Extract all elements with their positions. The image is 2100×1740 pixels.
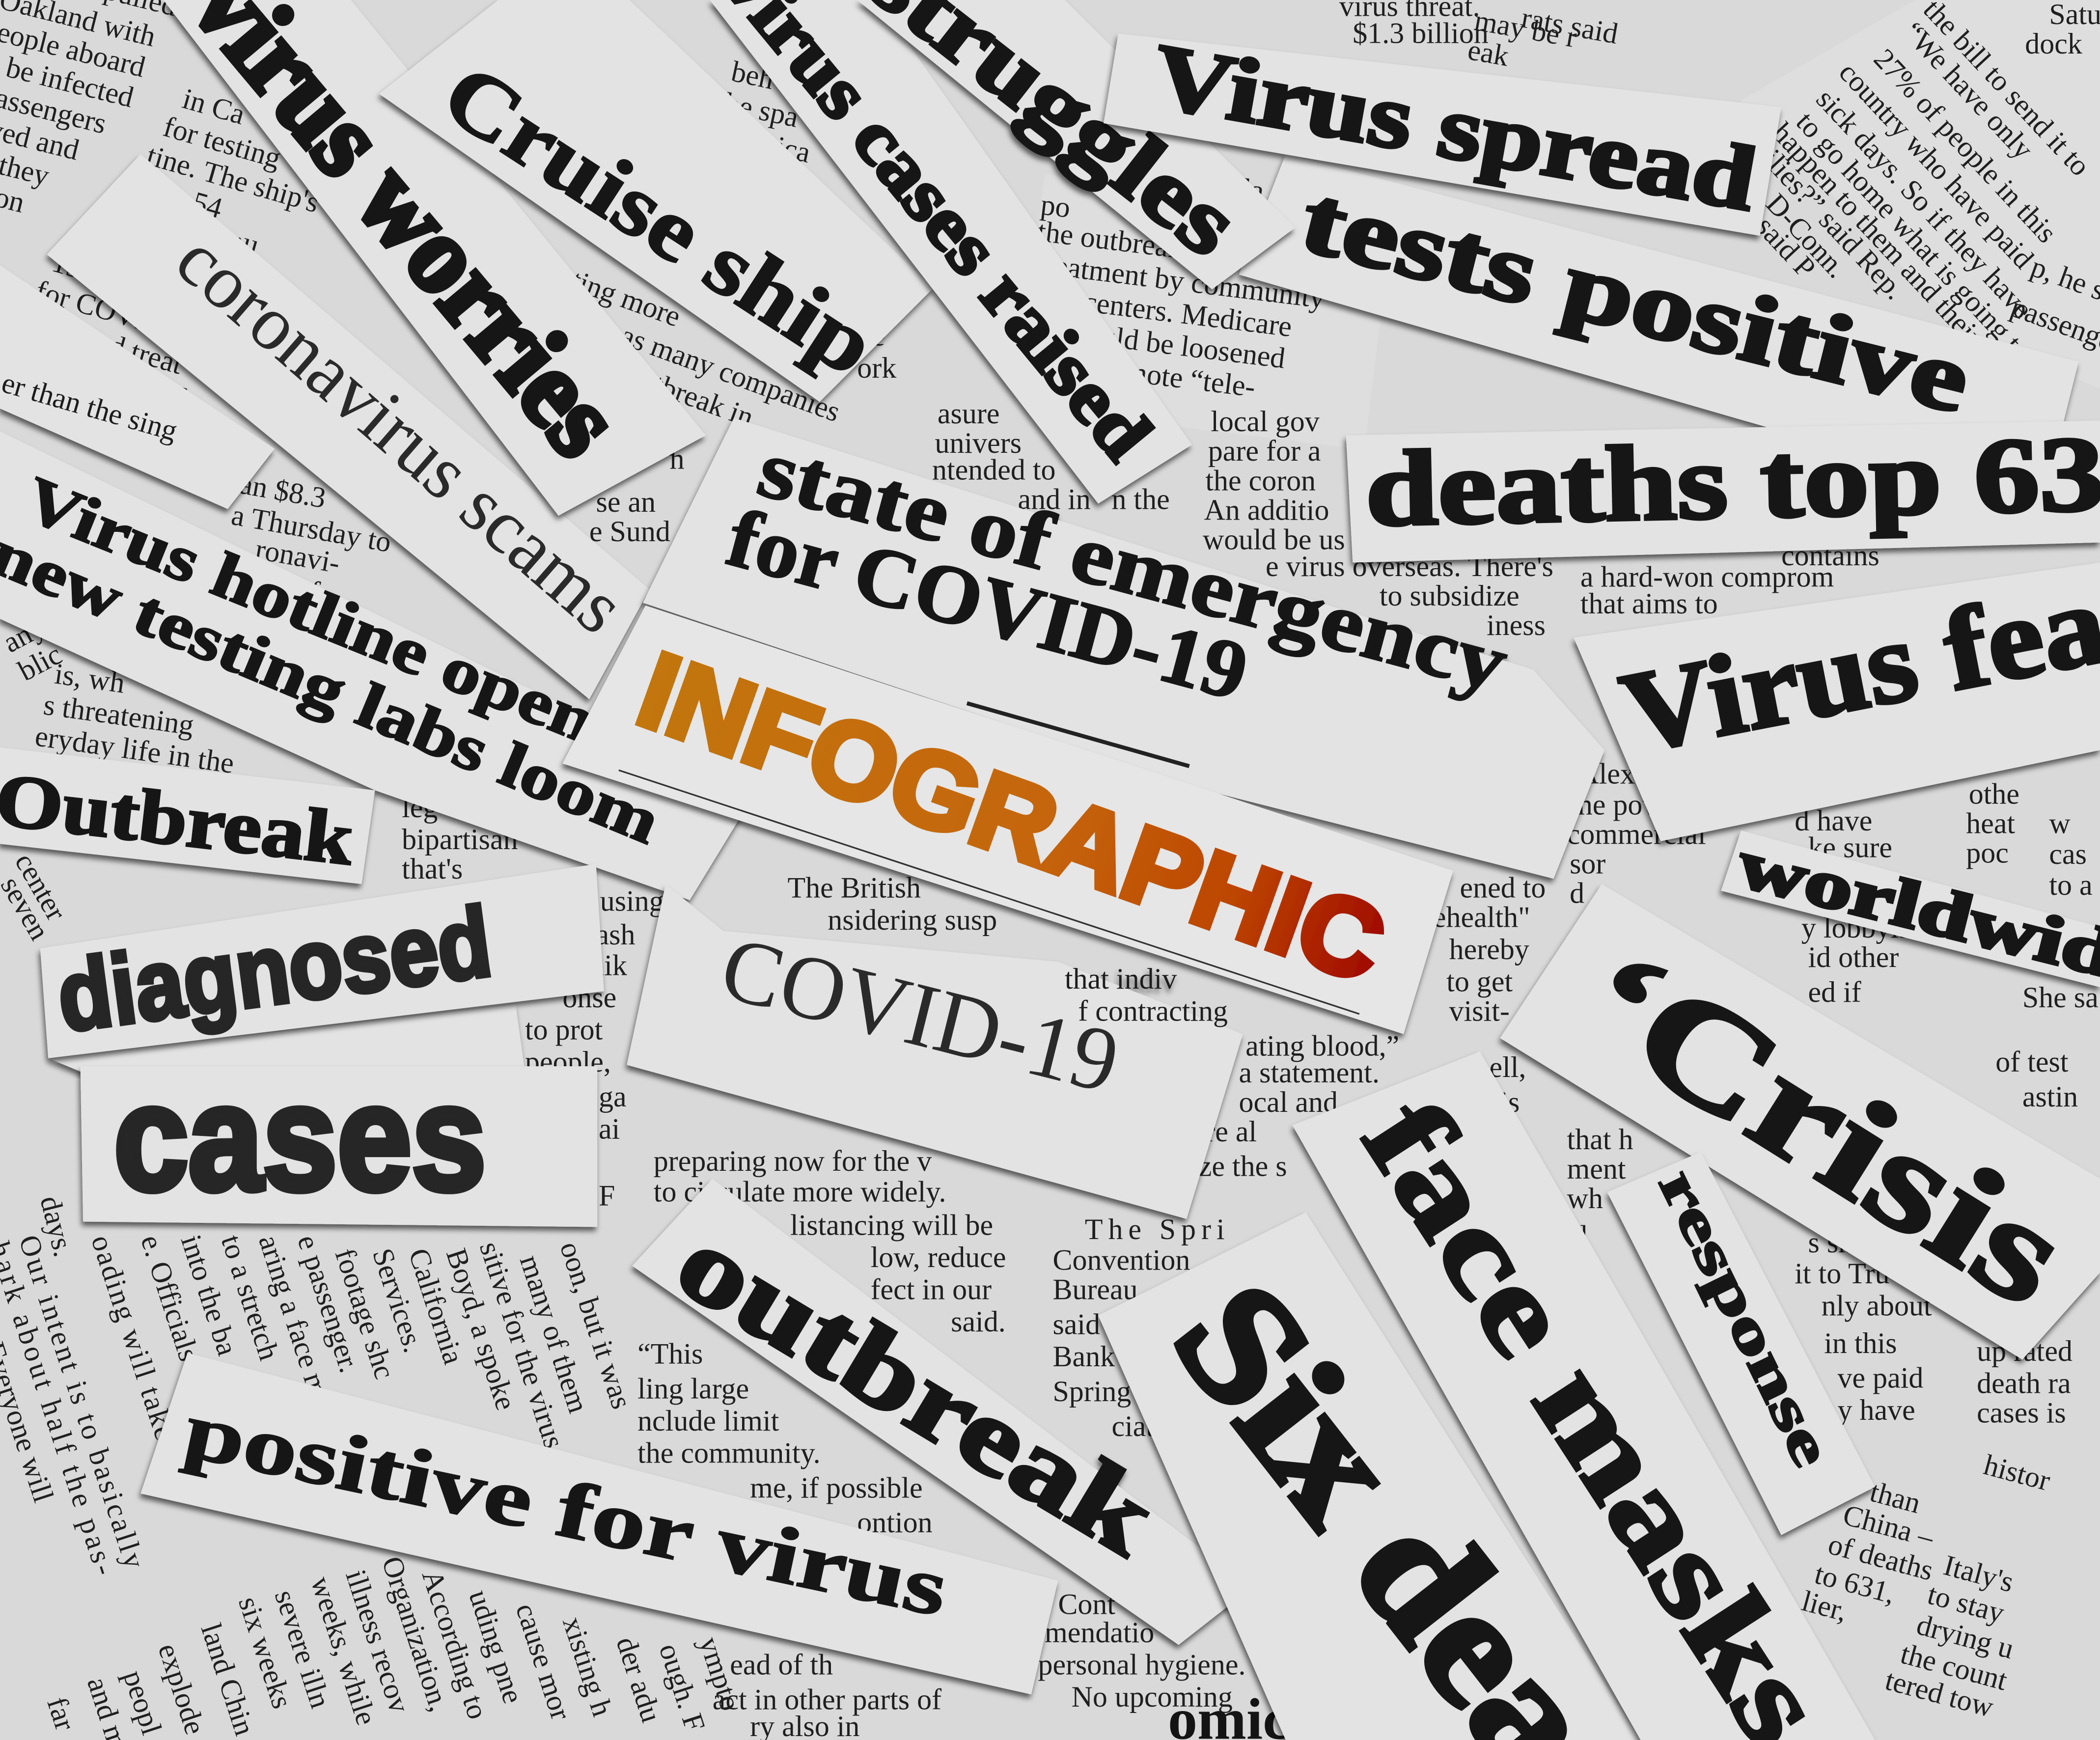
body text: cruise story: ountries will (110, 196, 261, 268)
body text: top left column (0, 0, 180, 243)
body text: left rotated column: many of them (514, 1251, 595, 1417)
body text: bottom centre column: personal hygiene. (1038, 1648, 1246, 1681)
body text: bottom right columns: than (1867, 1475, 1924, 1519)
headline: face masks: face masks (1337, 1076, 1852, 1740)
body text: cruise story: hich will dock (27, 339, 198, 417)
body text: medicare story: eatment by community (1053, 249, 1326, 315)
body text: bottom right columns: to 631, (1811, 1557, 1899, 1610)
body text: medicare story: the outbreak (1036, 215, 1185, 265)
body text: central column: ze the s (1199, 1150, 1287, 1183)
body text: top centre column: beh (729, 55, 777, 95)
body text: companies story (543, 264, 857, 461)
body text: spring convention column: Convention (1052, 1244, 1190, 1276)
body text: preparing column: me, if possible (750, 1471, 923, 1504)
body text: top right rotated column: ilies?” said Rep. (1757, 143, 1911, 305)
body text: bottom left rotated column: Organization, (376, 1552, 456, 1715)
body text: companies story: fter an outbreak in (543, 329, 758, 434)
clipping: struggles (851, 0, 1295, 289)
body text: university story: asure (938, 397, 999, 430)
body text: local government column (1203, 405, 1553, 641)
body text: left lower snippets: is, wh (53, 658, 127, 699)
body text: sunday story fragments: h (670, 443, 685, 475)
body text: university story: n the (1111, 483, 1170, 515)
body text: telehealth column: to get (1446, 965, 1513, 997)
body text: cruise story: from 54 (127, 167, 226, 224)
body text: cruise story: in Ca (179, 82, 249, 131)
body text: central column (1199, 1029, 1399, 1183)
body text: central column: ating blood,” (1245, 1029, 1399, 1062)
body text: top strip column: rats said (1519, 1, 1621, 50)
body text: top right rotated column: country who have paid (1833, 56, 2040, 275)
body text: telehealth column: is (1500, 1086, 1520, 1118)
body text: top right rotated column: to go home what is going to (1790, 106, 2038, 368)
body text: bottom left rotated column (41, 1552, 747, 1740)
body text: bottom right columns: to stay (1924, 1578, 2008, 1629)
body text: bottom right columns: histor (1981, 1448, 2054, 1497)
clipping: left blank paper scrap (0, 265, 275, 509)
headline: cases: cases (114, 1053, 486, 1221)
body text: right middle columns: in this (1824, 1327, 1897, 1359)
clipping: cruise ship (379, 0, 934, 402)
headline: virus spread: Virus spread (1146, 25, 1763, 230)
body text: bottom right columns: Italy's (1940, 1549, 2017, 1599)
body text: left lower snippets: bipartisan (402, 823, 518, 856)
body text: top centre column: America (707, 116, 813, 169)
body text: top right rotated column: 27% of people in this (1868, 43, 2063, 249)
title: infographic: INFOGRAPHIC (624, 630, 1399, 1005)
body text: cruise story: tined and treat (16, 303, 187, 381)
body text: spring convention column: said (1052, 1308, 1100, 1341)
background sheet: top right (1741, 0, 2100, 388)
body text: left rotated column: e. Officials are (135, 1231, 219, 1406)
body text: local government column: e virus overseas. There's (1266, 550, 1553, 582)
body text: left rotated column: California (402, 1244, 470, 1368)
body text: left lower snippets (0, 467, 997, 1018)
body text: bottom centre column: mendatio (1045, 1616, 1154, 1649)
headline: deaths top 63: deaths top 63 (1364, 415, 2100, 549)
body text: left rotated column: e passenger. (291, 1231, 366, 1377)
body text: local government column: local gov (1211, 405, 1320, 438)
headline: COVID-19: COVID-19 (712, 917, 1129, 1113)
body text: local government column: would be us (1203, 523, 1345, 555)
body text: companies story: ome, as many companies (555, 296, 844, 428)
body text: bottom left rotated column: illness recov (339, 1566, 416, 1717)
body text: university story (932, 397, 1170, 515)
body text: right middle columns: y have (1838, 1394, 1915, 1426)
body text: bottom centre column: No upcoming (1072, 1681, 1233, 1713)
body text: sunday story fragments: ith (643, 429, 674, 462)
scrap text: er than the sing (0, 366, 181, 447)
body text: sunday story fragments: ork (857, 352, 896, 384)
body text: cruise story: tine. The ship's (143, 139, 323, 219)
body text: far right column: poc (1966, 836, 2009, 869)
body text: left rotated column: into the ba (175, 1231, 244, 1359)
body text: sidebar beside cases: ga (599, 1080, 627, 1113)
body text: preparing column: preparing now for the v (654, 1145, 932, 1177)
body text: bottom centre column: Cont (1058, 1588, 1115, 1621)
body text: lobbyist column: y lobbyist. (1801, 911, 1926, 944)
body text: preparing column (637, 1145, 1006, 1539)
body text: right middle columns: s she (1808, 1226, 1866, 1259)
body text: left lower snippets: by (243, 591, 277, 628)
headline: diagnosed: diagnosed (51, 885, 497, 1052)
body text: left lower snippets: s of (274, 569, 322, 608)
clipping: infographic title strip (562, 606, 1453, 1034)
body text: telehealth column: hereby (1449, 933, 1529, 966)
body text: far right column: othe (1969, 777, 2019, 810)
body text: far right column: d have (1795, 804, 1872, 837)
body text: bottom right columns: the count (1897, 1637, 2011, 1697)
clipping: worldwide (1721, 827, 2100, 1002)
body text: left rotated column: to a stretch (215, 1231, 286, 1364)
body text on COVID-19 edge: that indiv (1065, 963, 1177, 995)
body text: top right rotated column (1750, 0, 2100, 368)
body text: lobbyist column: commercial (1567, 818, 1706, 850)
body text: medicare story: lth centers. Medicare (1044, 280, 1294, 343)
body text: lobbyist column (1567, 758, 1926, 1008)
body text: left lower snippets: nneq (64, 939, 121, 1005)
body text: left lower snippets: The British (788, 871, 921, 904)
body text: right middle columns: cases is (1977, 1397, 2066, 1429)
body text: sidebar beside cases: people, (525, 1046, 611, 1078)
body text: bottom centre column: act in other parts of (713, 1683, 941, 1715)
body text: bottom left rotated column: der adu (610, 1633, 668, 1726)
body text: bottom right columns: tered tow (1882, 1663, 1997, 1723)
body text: lobbyist column: d (1570, 877, 1584, 909)
body text: central column: re al (1205, 1115, 1257, 1148)
body text: medicare story: dolla (1203, 168, 1266, 207)
body text: cruise story: Abo (96, 225, 154, 271)
body text: bottom right columns: lier, (1798, 1584, 1851, 1628)
body text: bottom right columns: of deaths (1825, 1528, 1937, 1587)
body text: medicare story (1016, 148, 1396, 449)
body text: local government column: An additio (1204, 494, 1329, 526)
body text: local government column: to subsidize (1380, 580, 1520, 612)
body text: contracting fragment: f contracting (1078, 994, 1228, 1027)
body text: central column: ocal and (1239, 1086, 1338, 1118)
headline: crisis: ‘Crisis (1553, 915, 2095, 1337)
body text: central column: a statement. (1239, 1056, 1380, 1089)
body text: top centre column: rafting th (698, 147, 811, 201)
body text: left rotated column: Our intent is to basically (13, 1231, 151, 1572)
body text: top centre column (691, 53, 848, 236)
body text: top strip column (1339, 0, 2100, 72)
body text: far right column: ke sure (1808, 831, 1892, 864)
body text: preparing column: “This (637, 1338, 703, 1370)
body text: bottom left rotated column: uding pne (463, 1586, 529, 1707)
clipping: diagnosed (40, 864, 604, 1058)
body text: sunday story fragments: e Sund (589, 515, 670, 548)
body text: lobbyist column: ed if (1808, 976, 1861, 1008)
body text: compromise column: a hard-won comprom (1580, 561, 1834, 593)
body text: left rotated column: Services. (366, 1244, 430, 1356)
body text: bottom left rotated column: cause mor (510, 1600, 578, 1724)
body text: left lower snippets: that's (402, 853, 463, 885)
body text: bottom left rotated column: weeks, while (304, 1573, 383, 1729)
body text: far right column (1795, 777, 2093, 901)
body text: bottom left rotated column: land Chin (195, 1620, 261, 1739)
body text: far right column: cas (2049, 838, 2087, 870)
body text: preparing column: ling large (637, 1372, 749, 1405)
headline: state of emergency: state of emergency (749, 421, 1517, 710)
body text: sunday story fragments: se an (596, 486, 656, 518)
body text: telehealth column (1433, 871, 1633, 1279)
body text: medicare story: po (1039, 188, 1072, 224)
headline: worldwide: worldwide (1731, 827, 2100, 1002)
body text: bottom left rotated column: six weeks (232, 1593, 299, 1712)
body text: left rotated column: Boyd, a spoke (440, 1244, 523, 1414)
body text: sidebar beside cases: to prot (525, 1014, 603, 1046)
headline: for COVID-19: for COVID-19 (718, 491, 1257, 718)
clipping: outbreak strip (0, 747, 375, 884)
body text: right middle columns: nly about (1822, 1289, 1932, 1322)
body text: spring convention column: Bureau (1052, 1273, 1138, 1306)
clipping: virus fears (1574, 559, 2100, 841)
headline: virus hotline open: Virus hotline open (15, 463, 607, 757)
body text: sunday story fragments: ge (857, 320, 885, 352)
body text: cruise story: 19 of (49, 246, 116, 294)
body text: preparing column: to circulate more widely. (654, 1176, 946, 1208)
body text: left lower snippets: from (224, 617, 286, 659)
body text: bottom left rotated column: According to (416, 1566, 495, 1723)
body text: preparing column: said. (951, 1305, 1006, 1338)
body text: left rotated column: oading will take up (85, 1231, 194, 1483)
body text: cruise story: for COVID (32, 274, 171, 342)
body text: top left column: be infected (3, 51, 137, 113)
clipping: cases (81, 1053, 597, 1227)
body text: top right rotated column: happen to them and their (1766, 116, 1989, 353)
body text: left lower snippets: an $8.3 (237, 468, 329, 514)
body text: right middle columns: She sa (2022, 981, 2099, 1014)
body text: right middle columns: up rated (1977, 1335, 2072, 1367)
body text: top strip column: dock (2025, 28, 2082, 60)
body text: sidebar beside cases: F (599, 1180, 615, 1212)
body text: medicare story: would be loosened (1064, 315, 1287, 375)
body text: compromise column (1580, 539, 1879, 620)
body text: top right rotated column: sick days. So if they have (1810, 83, 2039, 325)
body text: left lower snippets: nsidering susp (828, 904, 997, 936)
clipping: positive for virus (140, 1353, 1058, 1694)
body text: right middle columns: it to Tru (1795, 1257, 1890, 1290)
body text: telehealth column: b (1574, 1246, 1588, 1279)
body text: top strip column: may be r (1472, 4, 1579, 54)
body text: university story: and in (1018, 483, 1091, 515)
body text: far right column: heat (1966, 807, 2016, 839)
body text: compromise column: contains (1781, 539, 1879, 572)
body text: bottom left rotated column: severe illn (269, 1586, 337, 1712)
headline: response: response (1647, 1160, 1844, 1476)
body text: sidebar beside cases: onse (562, 981, 616, 1014)
body text: local government column: the coron (1205, 464, 1316, 497)
body text: bottom centre column (713, 1588, 1246, 1740)
body text: bottom right columns: China – (1840, 1498, 1938, 1554)
clipping: crisis (1500, 884, 2100, 1359)
body text: telehealth column: that h (1567, 1123, 1633, 1156)
clipping: coronavirus scams (47, 154, 650, 699)
body text: top right rotated column: , D-Conn. (1750, 176, 1853, 284)
body text: bottom right columns: drying u (1913, 1608, 2017, 1665)
body text: university story: ntended to (932, 453, 1056, 486)
clipping: response (1607, 1152, 1875, 1535)
body text: left lower snippets: leg (402, 791, 438, 824)
body text: sunday story fragments (589, 320, 896, 548)
body text: bottom centre column: ead of th (730, 1648, 833, 1681)
body text: far right column: w (2049, 807, 2071, 839)
headline: cruise ship: Cruise ship (426, 44, 893, 394)
body text: sidebar beside cases: ash (596, 918, 635, 951)
body text: left rotated column: aring a face m (252, 1231, 335, 1401)
body text: top strip column: eak (1465, 33, 1511, 72)
body text: left lower snippets: blic (13, 638, 67, 687)
body text: companies story: ting more (567, 264, 685, 333)
clipping: state of emergency (643, 418, 1604, 879)
body text: bottom left rotated column: peopl (117, 1666, 168, 1739)
body text: spring convention column: Spring (1052, 1375, 1131, 1408)
body text: spring convention column: The Spri (1085, 1213, 1230, 1245)
body text: left rotated column (0, 1192, 638, 1579)
clipping: tests positive (1239, 154, 2078, 434)
body text: left lower snippets: a Thursday to (229, 498, 394, 558)
body text: top strip column: $1.3 billion (1353, 17, 1489, 49)
body text: telehealth column: ell, (1489, 1051, 1526, 1083)
body text: telehealth column: wh (1567, 1182, 1603, 1215)
body text: top right rotated column: “We have only (1897, 16, 2040, 166)
body text: top centre column: be spa (722, 86, 801, 134)
body text: preparing column: fect in our (871, 1273, 992, 1306)
body text: preparing column: low, reduce (871, 1241, 1006, 1273)
body text: university story: univers (935, 427, 1022, 459)
body text: preparing column: nclude limit (637, 1405, 779, 1437)
headline: virus fears: Virus fea (1612, 559, 2100, 777)
body text: left lower snippets: ronavi- (253, 533, 342, 580)
body text: telehealth column: ened to (1460, 871, 1546, 904)
body text: far right column: to a (2049, 869, 2093, 901)
body text: right middle columns: ve paid (1838, 1362, 1923, 1394)
body text: left rotated column: oon, but it was (554, 1238, 638, 1413)
body text: telehealth column: ehealth" (1433, 901, 1530, 933)
body text: telehealth column: visit- (1449, 994, 1510, 1027)
body text: bottom left rotated column: xisting h (556, 1613, 619, 1720)
body text: top right rotated column: said P (1750, 210, 1822, 284)
body text: local government column: iness (1487, 609, 1546, 641)
body text: telehealth column: ment (1567, 1153, 1626, 1185)
body text: spring convention column (1052, 1213, 1230, 1442)
body text: right middle columns: astin (2022, 1080, 2078, 1113)
body text: top centre column: said App (712, 183, 821, 236)
body text: bottom right columns (1798, 1448, 2054, 1725)
body text: spring convention column: Bank (1052, 1340, 1115, 1373)
body text: left rotated column: sitive for the virus (473, 1238, 571, 1452)
body text: telehealth column: el (1567, 1220, 1588, 1252)
body text: left lower snippets: center (9, 847, 73, 926)
body text: left rotated column: footage shc (329, 1244, 401, 1383)
headline: coronavirus scams: coronavirus scams (160, 216, 641, 650)
body text: sidebar beside cases (525, 885, 664, 1212)
body text: bottom left rotated column: ough. F (653, 1639, 712, 1735)
body text: spring convention column: ciat (1111, 1410, 1154, 1442)
body text: sidebar beside cases: ai (599, 1112, 620, 1145)
body text: preparing column: the community. (637, 1436, 821, 1469)
headline: outbreak: Outbreak (0, 758, 358, 881)
clipping: face masks (1293, 1051, 1875, 1740)
clipping: virus cases raised (708, 0, 1192, 504)
body text: preparing column: ontion (857, 1506, 933, 1539)
body text: compromise column: that aims to (1580, 587, 1718, 620)
body text: sidebar beside cases: lik (596, 949, 627, 982)
body text: bottom left rotated column: explode (152, 1639, 212, 1738)
body text: left lower snippets: eryday life in the (33, 719, 236, 779)
body text: cruise story (6, 55, 340, 435)
body text: local government column: pare for a (1208, 435, 1321, 467)
body text: sidebar beside cases: using (600, 885, 664, 917)
body text: lobbyist column: Alex (1577, 758, 1635, 790)
body text: bottom left rotated column: ympto (693, 1633, 747, 1714)
clipping: virus worries (164, 0, 706, 516)
clipping: virus spread (1104, 25, 1781, 236)
body text: right middle columns (1795, 981, 2099, 1429)
body text: cruise story: for testing (160, 110, 284, 174)
clipping: six deaths (1098, 1212, 1641, 1740)
body text: medicare story: remote “tele- (1100, 352, 1257, 403)
body text: left rotated column: days. (34, 1192, 80, 1260)
body text: right middle columns: death ra (1977, 1367, 2071, 1400)
body text: lobbyist column: id other (1808, 941, 1899, 973)
clipping: COVID-19 (627, 884, 1243, 1219)
clipping: deaths top 63 (1346, 415, 2100, 563)
clipping: outbreak large (632, 1179, 1252, 1645)
clipping: virus hotline and testing labs (0, 431, 753, 900)
body text: lobbyist column: the power (1570, 788, 1686, 821)
body text: left lower snippets: s threatening (42, 688, 196, 742)
clipping: blank scrap under cases (48, 1005, 525, 1072)
body text: preparing column: listancing will be (790, 1209, 993, 1242)
body text: right middle columns: of test (1995, 1046, 2069, 1078)
body text: bottom left rotated column: far (41, 1693, 82, 1734)
body text: lobbyist column: sor (1570, 847, 1605, 880)
headline: outbreak large: outbreak (658, 1202, 1176, 1578)
headline: tests positive: tests positive (1291, 165, 1980, 434)
headline: positive for virus: positive for virus (177, 1385, 955, 1633)
